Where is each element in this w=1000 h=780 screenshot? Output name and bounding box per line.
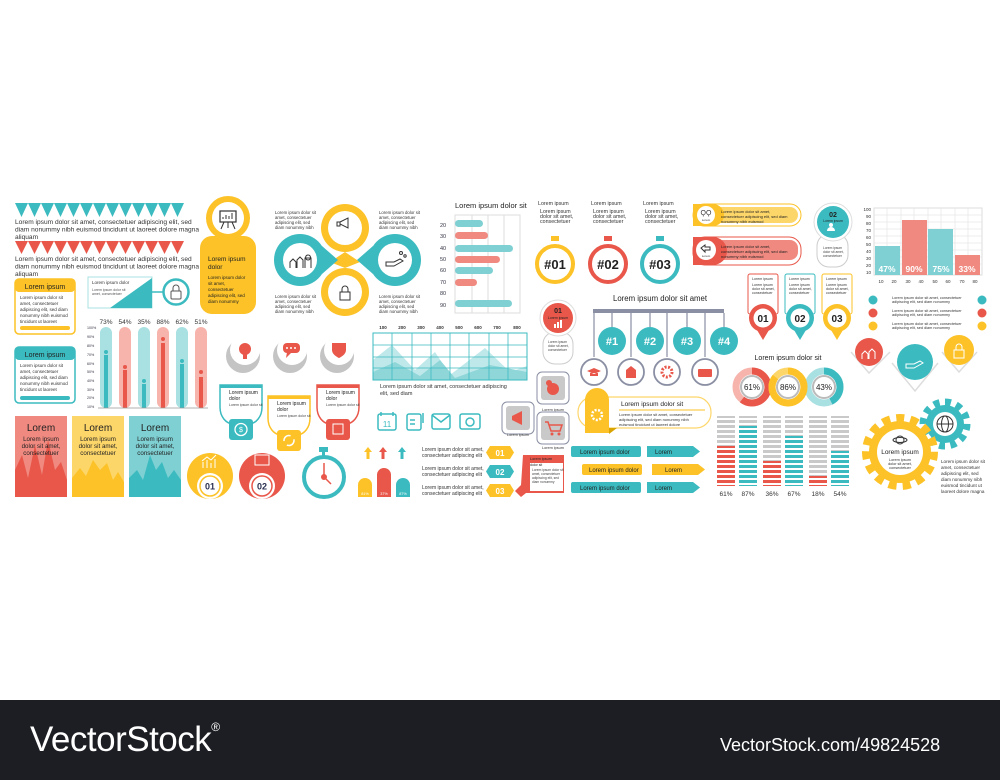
gears: consectetuer xyxy=(889,466,912,470)
legend dots list xyxy=(868,296,986,330)
area chart table: 100 xyxy=(379,325,387,330)
hanging circles tree: #1 xyxy=(606,336,618,348)
01 red badge with card: Lorem ipsum xyxy=(548,340,567,344)
horizontal bar chart: 20 xyxy=(440,223,446,229)
yellow card with presentation icon: diam nonummy xyxy=(208,299,240,304)
column bar chart: 90% xyxy=(905,264,923,274)
yellow callout with gear tag: adipiscing elit, sed diam nonummy nibh xyxy=(619,417,689,422)
stopwatches #01 #02 #03: Lorem ipsum xyxy=(538,201,569,207)
column bar chart: 20 xyxy=(891,279,897,284)
column bar chart: 60 xyxy=(945,279,951,284)
triangle banner teal with text: Lorem ipsum dolor sit amet, consectetuer adipiscing elit, sed xyxy=(15,219,192,226)
column bar chart xyxy=(863,207,982,284)
diagonal teal card with lock icon: amet, consectetuer xyxy=(92,292,123,296)
infinity diagram: amet, consectetuer xyxy=(379,215,416,220)
arrow label buttons xyxy=(571,446,705,493)
yellow text box xyxy=(15,279,75,334)
arrow label buttons: Lorem xyxy=(655,486,672,492)
arrow label buttons: Lorem ipsum dolor xyxy=(580,450,630,456)
three colored area cards: Lorem xyxy=(84,423,112,434)
stopwatches #01 #02 #03: Lorem ipsum xyxy=(540,209,571,215)
hanging circles tree: #3 xyxy=(681,336,693,348)
vertical percent bar chart: 90% xyxy=(87,335,95,339)
triangle banner red with text: Lorem ipsum dolor sit amet, consectetuer adipiscing elit, sed xyxy=(15,256,192,263)
vertical percent bar chart: 10% xyxy=(87,405,95,409)
numbered pins 01 02 03: dolor sit amet, xyxy=(752,287,775,291)
image id text: VectorStock.com/49824528 xyxy=(720,735,940,755)
stopwatches #01 #02 #03 xyxy=(537,201,678,282)
triangle banner teal with text xyxy=(15,203,199,241)
numbered pins 01 02 03 xyxy=(748,274,852,340)
shield cards with icons: Lorem ipsum xyxy=(326,390,355,396)
01 red badge with card xyxy=(540,300,576,364)
crescent icons xyxy=(226,335,354,373)
vertical percent bar chart: 54% xyxy=(118,319,132,326)
shield cards with icons: dolor xyxy=(326,396,337,402)
stopwatches #01 #02 #03: consectetuer xyxy=(593,219,624,225)
numbered pins 01 02 03: Lorem ipsum xyxy=(789,283,810,287)
legend dots list: Lorem ipsum dolor sit amet, consectetuer xyxy=(892,322,962,326)
infinity diagram: Lorem ipsum dolor sit xyxy=(275,294,317,299)
speech pill cards: Lorem xyxy=(702,254,711,258)
arrows and tombstone bars xyxy=(358,447,410,497)
horizontal bar chart: Lorem ipsum dolor sit xyxy=(455,201,528,210)
yellow card with presentation icon: adipiscing elit, sed xyxy=(208,293,245,298)
diagonal teal card with lock icon: Lorem ipsum dolor sit xyxy=(92,288,125,292)
infinity diagram: diam nonummy nibh xyxy=(275,225,314,230)
triangle banner teal with text: diam nonummy nibh euismod tincidunt ut laoreet dolore magna xyxy=(15,226,199,234)
striped progress columns: 36% xyxy=(765,491,779,498)
area chart table: 500 xyxy=(455,325,463,330)
shield cards with icons: Lorem ipsum dolor sit xyxy=(277,414,310,418)
column bar chart: 50 xyxy=(932,279,938,284)
yellow card with presentation icon xyxy=(200,196,256,314)
area chart table: elit, sed diam xyxy=(380,391,413,397)
numbered hex list 01 02 03: consectetuer adipiscing elit xyxy=(422,453,483,459)
column bar chart: 80 xyxy=(866,221,871,226)
legend dots list: adipiscing elit, sed diam nonummy xyxy=(892,300,950,304)
vertical percent bar chart: 70% xyxy=(87,353,95,357)
02 teal badge with card: 02 xyxy=(829,212,837,219)
three colored area cards: Lorem ipsum xyxy=(23,436,59,443)
donut charts xyxy=(736,355,840,403)
legend dots list: adipiscing elit, sed diam nonummy xyxy=(892,326,950,330)
legend dots list: adipiscing elit, sed diam nonummy xyxy=(892,313,950,317)
outline icons row: 11 xyxy=(383,420,392,429)
gray square icon buttons: Lorem ipsum xyxy=(542,446,564,450)
numbered hex list 01 02 03: 01 xyxy=(496,449,505,458)
arrow label buttons: Lorem ipsum dolor xyxy=(580,486,630,492)
infinity diagram: diam nonummy nibh xyxy=(379,309,418,314)
shield cards with icons: dolor xyxy=(277,407,288,413)
numbered pins 01 02 03: Lorem ipsum xyxy=(789,277,810,281)
02 teal badge with card: dolor sit amet, xyxy=(823,250,844,254)
horizontal bar chart: 40 xyxy=(440,246,446,252)
shield cards with icons: Lorem ipsum dolor sit xyxy=(229,403,262,407)
triangle banner red with text: diam nonummy nibh euismod tincidunt ut laoreet dolore magna xyxy=(15,264,199,270)
yellow text box: Lorem ipsum xyxy=(25,284,65,291)
vertical percent bar chart: 62% xyxy=(175,319,189,326)
donut charts: Lorem ipsum dolor sit xyxy=(755,355,822,362)
donut charts: 86% xyxy=(780,383,796,392)
numbered hex list 01 02 03: Lorem ipsum dolor sit amet, xyxy=(422,485,484,491)
red arrow card: dolor sit xyxy=(530,463,542,467)
yellow card with presentation icon: consectetuer xyxy=(208,287,234,292)
numbered hex list 01 02 03: Lorem ipsum dolor sit amet, xyxy=(422,447,484,453)
three colored area cards: dolor sit amet, xyxy=(136,443,175,450)
circle badges 01 02: 02 xyxy=(257,482,267,492)
speech pill cards: Lorem ipsum dolor sit amet, xyxy=(721,209,770,214)
column bar chart: 47% xyxy=(878,264,896,274)
three colored area cards: Lorem ipsum xyxy=(80,436,116,443)
yellow callout with gear tag: Lorem ipsum dolor sit xyxy=(621,401,683,408)
pin icons xyxy=(851,335,977,391)
speech pill cards: Lorem xyxy=(702,218,711,222)
gears: diam nonummy nibh xyxy=(941,477,983,482)
circle badges 01 02: 01 xyxy=(205,482,215,492)
shield cards with icons: Lorem ipsum xyxy=(229,390,258,396)
teal text box: Lorem ipsum xyxy=(25,352,65,359)
gears: euismod tincidunt ut xyxy=(941,483,983,488)
triangle banner teal with text: aliquam xyxy=(15,234,39,241)
infinity diagram: adipiscing elit, sed xyxy=(275,220,311,225)
column bar chart: 30 xyxy=(905,279,911,284)
column bar chart: 75% xyxy=(932,264,950,274)
numbered hex list 01 02 03 xyxy=(422,446,514,497)
horizontal bar chart: 30 xyxy=(440,234,446,240)
speech pill cards: consectetuer adipiscing elit, sed diam xyxy=(721,249,788,254)
yellow card with presentation icon: Lorem ipsum dolor xyxy=(208,275,246,280)
column bar chart: 10 xyxy=(866,270,871,275)
horizontal bar chart xyxy=(440,201,528,313)
yellow callout with gear tag xyxy=(578,388,711,434)
yellow text box: Lorem ipsum dolor sit xyxy=(20,295,64,300)
stopwatches #01 #02 #03: consectetuer xyxy=(645,219,676,225)
vertical percent bar chart: 20% xyxy=(87,396,95,400)
hanging circles tree: #4 xyxy=(718,336,731,348)
column bar chart: 40 xyxy=(866,249,871,254)
area chart table: Lorem ipsum dolor sit amet, consectetuer adipiscing xyxy=(380,384,507,390)
vertical percent bar chart xyxy=(87,319,208,409)
01 red badge with card: 01 xyxy=(554,308,562,315)
numbered pins 01 02 03: 03 xyxy=(831,314,843,325)
numbered pins 01 02 03: dolor sit amet, xyxy=(826,287,849,291)
stopwatches #01 #02 #03: dolor sit amet, xyxy=(593,214,626,220)
01 red badge with card: Lorem ipsum xyxy=(548,316,568,320)
gray square icon buttons xyxy=(502,372,569,450)
horizontal bar chart: 60 xyxy=(440,268,446,274)
three colored area cards: Lorem xyxy=(27,423,55,434)
infinity diagram: Lorem ipsum dolor sit xyxy=(379,294,421,299)
stopwatches #01 #02 #03: #03 xyxy=(649,257,671,272)
column bar chart: 90 xyxy=(866,214,871,219)
gears: Lorem ipsum xyxy=(881,449,919,456)
column bar chart: 10 xyxy=(878,279,884,284)
shield cards with icons: Lorem ipsum xyxy=(277,401,306,407)
yellow callout with gear tag: Lorem ipsum dolor sit amet, consectetuer xyxy=(619,412,693,417)
speech pill cards: nonummy nibh euismod xyxy=(721,219,763,224)
horizontal bar chart: 90 xyxy=(440,303,446,309)
stopwatches #01 #02 #03: #02 xyxy=(597,257,619,272)
three colored area cards: Lorem ipsum xyxy=(137,436,173,443)
vertical percent bar chart: 88% xyxy=(156,319,170,326)
infinity diagram: diam nonummy nibh xyxy=(275,309,314,314)
numbered pins 01 02 03: consectetuer xyxy=(826,291,847,295)
hanging circles tree: Lorem ipsum dolor sit amet xyxy=(613,294,708,303)
infinity diagram xyxy=(274,204,421,316)
shield cards with icons: $ xyxy=(239,427,243,434)
logo text: VectorStock® xyxy=(30,720,220,759)
column bar chart: 33% xyxy=(958,264,976,274)
infinity diagram: amet, consectetuer xyxy=(275,299,312,304)
three colored area cards: consectetuer xyxy=(23,450,59,457)
triangle banner red with text: aliquam xyxy=(15,271,39,278)
infinity diagram: adipiscing elit, sed xyxy=(379,220,415,225)
column bar chart: 40 xyxy=(918,279,924,284)
vertical percent bar chart: 100% xyxy=(87,326,97,330)
speech pill cards xyxy=(693,204,801,265)
numbered hex list 01 02 03: consectetuer adipiscing elit xyxy=(422,472,483,478)
diagonal teal card with lock icon xyxy=(88,277,188,308)
02 teal badge with card: Lorem ipsum xyxy=(823,246,842,250)
gears: laoreet dolore magna xyxy=(941,489,985,494)
horizontal bar chart: 80 xyxy=(440,291,446,297)
vertical percent bar chart: 35% xyxy=(137,319,151,326)
speech pill cards: nonummy nibh euismod xyxy=(721,254,763,259)
speech pill cards: Lorem ipsum dolor sit amet, xyxy=(721,244,770,249)
striped progress columns: 18% xyxy=(811,491,825,498)
infinity diagram: Lorem ipsum dolor sit xyxy=(275,210,317,215)
striped progress columns: 54% xyxy=(833,491,847,498)
yellow card with presentation icon: Lorem ipsum xyxy=(208,256,246,263)
gray square icon buttons: Lorem ipsum xyxy=(507,433,529,437)
numbered hex list 01 02 03: 03 xyxy=(496,487,505,496)
diagonal teal card with lock icon: Lorem ipsum dolor xyxy=(92,280,130,285)
infinity diagram: Lorem ipsum dolor sit xyxy=(379,210,421,215)
area chart table: 600 xyxy=(474,325,482,330)
gray square icon buttons: Lorem ipsum xyxy=(542,408,564,412)
numbered pins 01 02 03: 02 xyxy=(794,314,806,325)
red arrow card: amet, consectetuer xyxy=(532,472,561,476)
column bar chart: 50 xyxy=(866,242,871,247)
teal text box: adipiscing elit, sed diam xyxy=(20,375,68,380)
stopwatches #01 #02 #03: consectetuer xyxy=(540,219,571,225)
column bar chart: 20 xyxy=(866,263,871,268)
vertical percent bar chart: 51% xyxy=(194,319,208,326)
numbered pins 01 02 03: consectetuer xyxy=(789,291,810,295)
donut charts: 61% xyxy=(744,383,760,392)
stopwatches #01 #02 #03: Lorem ipsum xyxy=(591,201,622,207)
vertical percent bar chart: 73% xyxy=(99,319,113,326)
shield cards with icons: Lorem ipsum dolor sit xyxy=(326,403,359,407)
01 red badge with card: consectetuer xyxy=(548,348,568,352)
three colored area cards: consectetuer xyxy=(80,450,116,457)
area chart table xyxy=(373,325,527,397)
vertical percent bar chart: 60% xyxy=(87,362,95,366)
column bar chart: 80 xyxy=(972,279,978,284)
stopwatches #01 #02 #03: Lorem ipsum xyxy=(645,209,676,215)
numbered pins 01 02 03: consectetuer xyxy=(752,291,773,295)
hanging circles tree xyxy=(581,294,738,385)
striped progress columns: 61% xyxy=(719,491,733,498)
numbered pins 01 02 03: dolor sit amet, xyxy=(789,287,812,291)
yellow text box: tincidunt ut laoreet xyxy=(20,319,58,324)
area chart table: 700 xyxy=(493,325,501,330)
striped progress columns xyxy=(717,416,849,498)
yellow text box: nonummy nibh euismod xyxy=(20,313,68,318)
arrows and tombstone bars: 87% xyxy=(399,492,407,496)
vertical percent bar chart: 50% xyxy=(87,370,95,374)
three colored area cards xyxy=(15,416,181,497)
numbered pins 01 02 03: Lorem ipsum xyxy=(826,283,847,287)
column bar chart: 30 xyxy=(866,256,871,261)
shield cards with icons xyxy=(220,385,359,451)
red arrow card: Lorem ipsum dolor sit xyxy=(532,468,564,472)
column bar chart: 60 xyxy=(866,235,871,240)
area chart table: 200 xyxy=(398,325,406,330)
yellow card with presentation icon: sit amet, xyxy=(208,281,225,286)
infinity diagram: adipiscing elit, sed xyxy=(379,304,415,309)
circle badges 01 02 xyxy=(187,453,285,499)
02 teal badge with card: Lorem ipsum xyxy=(823,219,843,223)
arrow label buttons: Lorem xyxy=(655,450,672,456)
horizontal bar chart: 50 xyxy=(440,257,446,263)
stopwatches #01 #02 #03: dolor sit amet, xyxy=(540,214,573,220)
gears: dolor sit amet, xyxy=(888,462,912,466)
column bar chart: 100 xyxy=(863,207,871,212)
teal text box: tincidunt ut laoreet xyxy=(20,387,58,392)
horizontal bar chart: 70 xyxy=(440,280,446,286)
infinity diagram: adipiscing elit, sed xyxy=(275,304,311,309)
donut charts: 43% xyxy=(816,383,832,392)
three colored area cards: dolor sit amet, xyxy=(22,443,61,450)
speech pill cards: ϘϘ xyxy=(701,210,712,217)
numbered pins 01 02 03: Lorem ipsum xyxy=(752,283,773,287)
numbered hex list 01 02 03: 02 xyxy=(496,468,505,477)
yellow callout with gear tag: euismod tincidunt ut laoreet dolore xyxy=(619,422,681,427)
triangle banner red with text xyxy=(15,241,199,278)
gears: Lorem ipsum xyxy=(889,458,911,462)
three colored area cards: dolor sit amet, xyxy=(79,443,118,450)
column bar chart: 70 xyxy=(866,228,871,233)
numbered pins 01 02 03: Lorem ipsum xyxy=(826,277,847,281)
stopwatches #01 #02 #03: Lorem ipsum xyxy=(643,201,674,207)
gears: Lorem ipsum dolor sit xyxy=(941,459,986,464)
striped progress columns: 67% xyxy=(787,491,801,498)
footer watermark bar xyxy=(0,700,1000,780)
area chart table: 400 xyxy=(436,325,444,330)
02 teal badge with card: consectetuer xyxy=(823,254,843,258)
01 red badge with card: dolor sit amet, xyxy=(548,344,569,348)
arrows and tombstone bars: 37% xyxy=(380,492,388,496)
teal text box: Lorem ipsum dolor sit xyxy=(20,363,64,368)
yellow text box: adipiscing elit, sed diam xyxy=(20,307,68,312)
legend dots list: Lorem ipsum dolor sit amet, consectetuer xyxy=(892,296,962,300)
red arrow card: adipiscing elit, sed xyxy=(532,476,559,480)
infinity diagram: diam nonummy nibh xyxy=(379,225,418,230)
gears: adipiscing elit, sed xyxy=(941,471,979,476)
hanging circles tree: #2 xyxy=(644,336,656,348)
infinity diagram: amet, consectetuer xyxy=(379,299,416,304)
three colored area cards: consectetuer xyxy=(137,450,173,457)
teal text box: nonummy nibh euismod xyxy=(20,381,68,386)
legend dots list: Lorem ipsum dolor sit amet, consectetuer xyxy=(892,309,962,313)
02 teal badge with card xyxy=(814,203,852,267)
column bar chart: 70 xyxy=(959,279,965,284)
speech pill cards: consectetuer adipiscing elit, sed diam xyxy=(721,214,788,219)
red arrow card xyxy=(515,455,564,497)
gears: amet, consectetuer xyxy=(941,465,981,470)
numbered hex list 01 02 03: consectetuer adipiscing elit xyxy=(422,491,483,497)
area chart table: 300 xyxy=(417,325,425,330)
numbered hex list 01 02 03: Lorem ipsum dolor sit amet, xyxy=(422,466,484,472)
arrow label buttons: Lorem xyxy=(665,468,682,474)
red arrow card: Lorem ipsum xyxy=(530,457,552,461)
teal text box: amet, consectetuer xyxy=(20,369,59,374)
vertical percent bar chart: 80% xyxy=(87,344,95,348)
vertical percent bar chart: 30% xyxy=(87,388,95,392)
arrow label buttons: Lorem ipsum dolor xyxy=(589,468,639,474)
arrows and tombstone bars: 81% xyxy=(361,492,369,496)
outline icons row xyxy=(378,412,480,430)
stopwatches #01 #02 #03: dolor sit amet, xyxy=(645,214,678,220)
numbered pins 01 02 03: Lorem ipsum xyxy=(752,277,773,281)
gears xyxy=(866,402,986,494)
yellow text box: amet, consectetuer xyxy=(20,301,59,306)
infinity diagram: amet, consectetuer xyxy=(275,215,312,220)
shield cards with icons: dolor xyxy=(229,396,240,402)
stopwatches #01 #02 #03: Lorem ipsum xyxy=(593,209,624,215)
striped progress columns: 87% xyxy=(741,491,755,498)
red arrow card: diam nonummy xyxy=(532,480,555,484)
area chart table: 800 xyxy=(513,325,521,330)
stopwatches #01 #02 #03: #01 xyxy=(544,257,566,272)
three colored area cards: Lorem xyxy=(141,423,169,434)
yellow card with presentation icon: dolor xyxy=(208,264,223,271)
vertical percent bar chart: 40% xyxy=(87,379,95,383)
numbered pins 01 02 03: 01 xyxy=(757,314,769,325)
stopwatch teal xyxy=(304,447,344,497)
teal text box xyxy=(15,347,75,403)
